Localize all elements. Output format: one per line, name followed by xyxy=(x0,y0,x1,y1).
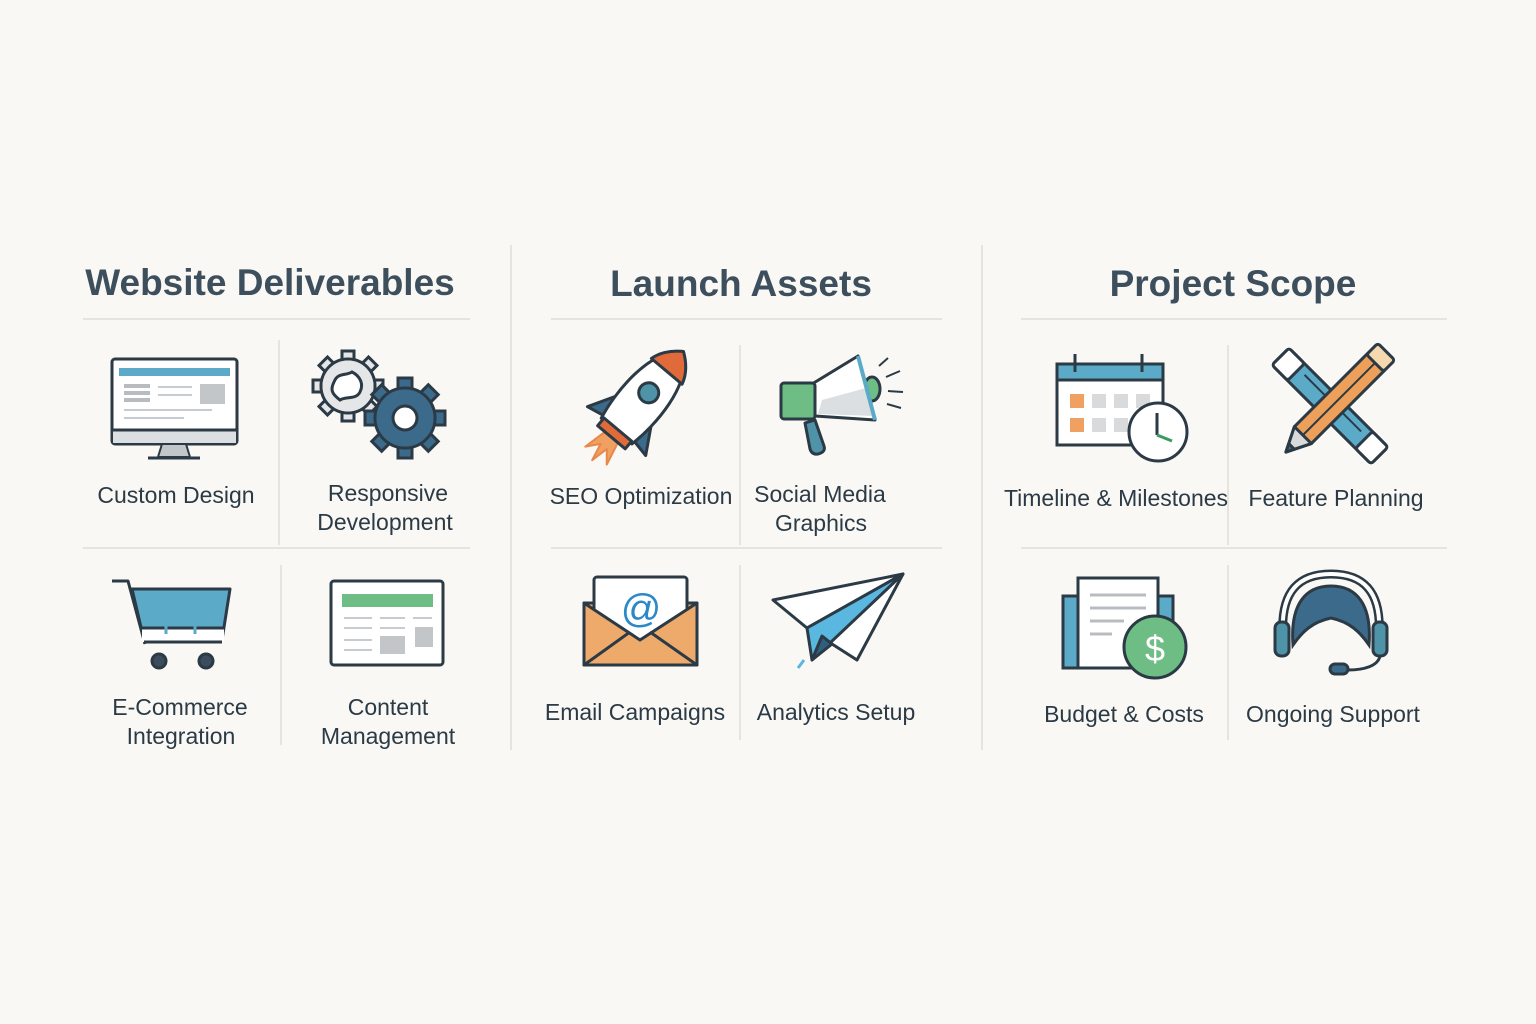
label: Feature Planning: Feature Planning xyxy=(1248,485,1424,511)
text: Development xyxy=(317,509,453,535)
label: Responsive Development: Responsive xyxy=(328,480,448,506)
icon: megaphone xyxy=(781,356,903,454)
text: Management xyxy=(321,723,456,749)
icon: paper plane xyxy=(773,574,903,668)
icon: monitor xyxy=(112,359,237,458)
icon: gears xyxy=(313,351,445,458)
icon: calendar with clock xyxy=(1057,354,1187,461)
icon: content page xyxy=(331,581,443,665)
text: Graphics xyxy=(775,510,867,536)
label: Email Campaigns: Email Campaigns xyxy=(545,699,725,725)
heading: Website Deliverables: Website Deliverables xyxy=(85,262,455,303)
label: Custom Design: Custom Design xyxy=(97,482,255,508)
icon: email envelope xyxy=(584,577,697,665)
label: E-Commerce Integration: E-Commerce xyxy=(112,694,248,720)
heading: Project Scope: Project Scope xyxy=(1110,263,1356,304)
icon: budget document with dollar xyxy=(1063,578,1186,678)
icon: support headset xyxy=(1275,574,1387,674)
text: Integration xyxy=(127,723,235,749)
label: Ongoing Support: Ongoing Support xyxy=(1246,701,1421,727)
label: Content Management: Content xyxy=(348,694,429,720)
label: SEO Optimization: SEO Optimization xyxy=(550,483,732,509)
icon: budget document with dollar: $ xyxy=(1145,628,1165,669)
icon: pencil and ruler crossed xyxy=(1272,343,1395,464)
label: Budget & Costs: Budget & Costs xyxy=(1044,701,1204,727)
label: Social Media Graphics: Social Media xyxy=(754,481,886,507)
label: Analytics Setup: Analytics Setup xyxy=(757,699,915,725)
icon: email envelope: @ xyxy=(621,587,661,631)
icon: rocket xyxy=(563,327,713,485)
heading: Launch Assets: Launch Assets xyxy=(610,263,872,304)
label: Timeline & Milestones: Timeline & Milestones xyxy=(1004,485,1228,511)
icon: shopping cart xyxy=(112,581,230,668)
